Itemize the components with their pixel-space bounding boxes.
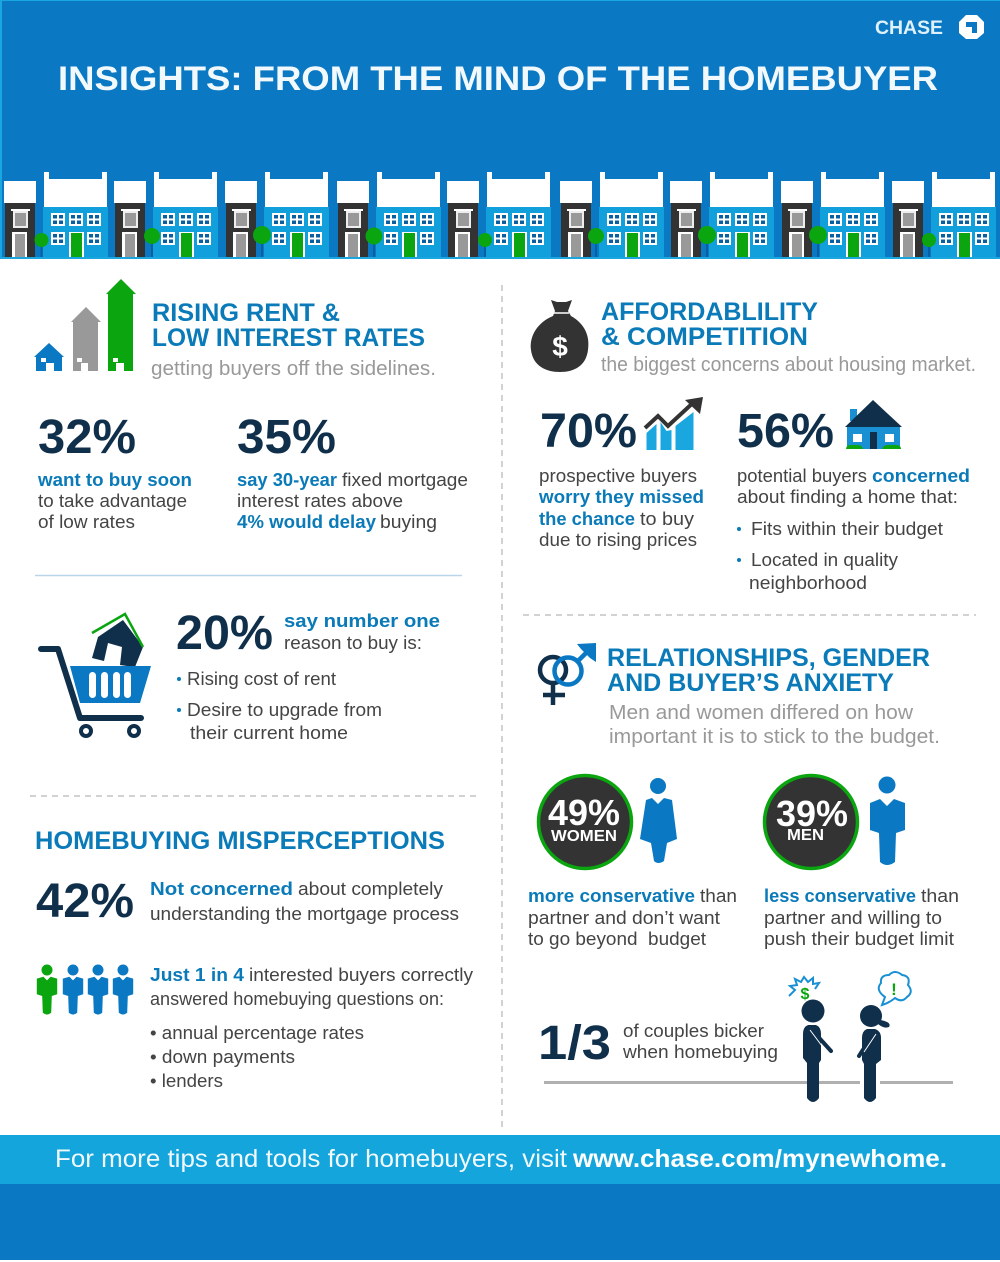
stat: 70% [538,405,704,550]
text: more conservative: more conservative [528,885,695,906]
text: just 1 in 4: Just 1 in 4 [150,964,245,985]
stat: 56%: about finding a home that: [737,486,958,507]
text: just 1 in 4: • annual percentage rates [150,1022,364,1043]
stat: 56% [737,405,970,593]
stat badge: 49% women [538,776,632,868]
icon: money bag [531,300,588,372]
heading: relationships [607,644,940,748]
heading: relationships: Men and women differed on how [609,702,914,724]
stat: 70%: prospective buyers [539,465,697,486]
text: just 1 in 4 [150,964,474,1091]
icon: four people [37,964,133,1015]
text: just 1 in 4: • lenders [150,1070,223,1091]
stat: 42%: 42% [36,875,134,928]
title: INSIGHTS: FROM THE MIND OF THE HOMEBUYER [58,60,938,98]
icon: thought cloud: ! [891,980,897,999]
stat: 32%: 32% [38,411,136,464]
text: just 1 in 4: • down payments [150,1046,295,1067]
stat: 20%: their current home [190,722,348,743]
heading: relationships: AND BUYER’S ANXIETY [607,669,894,697]
icon: house with roof [845,400,902,449]
icon: gender symbols [540,643,596,705]
icon: woman [640,778,677,863]
stat: 32%: want to buy soon [37,469,192,490]
icon: money bag: $ [552,331,568,362]
stat: 32%: of low rates [38,511,135,532]
icon: rising chart arrow [645,397,703,450]
stat: 70%: to buy [640,508,695,529]
text: more conservative [528,885,737,949]
stat badge: 39% men: MEN [787,827,824,844]
heading: affordability: AFFORDABLILITY [601,298,818,326]
stat: 20%: 20% [176,607,273,660]
text: more conservative: to go beyond budget [528,928,706,949]
stat: 32%: to take advantage [38,490,187,511]
stat: 20% [176,607,440,743]
footer text [55,1145,947,1173]
stat: 70%: worry they missed [538,486,704,507]
stat: 20%: Desire to upgrade from [187,699,382,720]
heading: rising rent [151,299,436,380]
text: less conservative: less conservative [764,885,916,906]
stat: 56%: 56% [737,405,834,458]
stat: 42%: about completely [298,878,444,899]
illustration: bickering couple [789,972,911,1102]
heading: rising rent: LOW INTEREST RATES [152,324,425,352]
stat: 56%: concerned [872,465,970,486]
stat: 42%: understanding the mortgage process [150,903,459,924]
text: just 1 in 4: answered homebuying questions on: [150,988,444,1009]
text: more conservative: partner and don’t want [528,907,720,928]
stat: 42% [36,875,459,928]
text: less conservative: push their budget limit [764,928,954,949]
stat: 42%: Not concerned [150,878,293,899]
stat: 70%: due to rising prices [539,529,697,550]
heading: rising rent: RISING RENT & [152,299,340,327]
stat: 56%: Located in quality [751,549,899,570]
stat: 56%: Fits within their budget [751,518,943,539]
heading: homebuying misperceptions: HOMEBUYING MISPERCEPTIONS [35,827,445,855]
stat: 1/3 of couples: when homebuying [622,1041,778,1062]
text: more conservative: than [700,885,737,906]
text: less conservative [764,885,959,949]
stat: 20%: reason to buy is: [284,632,422,653]
icon: frustration burst: $ [801,986,810,1003]
stat: 35%: fixed mortgage [342,469,468,490]
stat: 35%: 4% would delay [237,511,377,532]
stat: 70%: the chance [539,508,635,529]
stat: 56%: neighborhood [749,572,867,593]
logo: Chase: CHASE [875,18,943,39]
stat: 20%: Rising cost of rent [187,668,336,689]
stat: 1/3 of couples: of couples bicker [623,1020,764,1041]
figure: man [802,1000,831,1102]
stat: 35%: buying [380,511,437,532]
header banner [0,0,1000,259]
stat: 35%: 35% [237,411,336,464]
stat: 56%: potential buyers [737,465,867,486]
text: just 1 in 4: interested buyers correctly [249,964,474,985]
stat badge: 39% men [764,776,858,868]
section dividers [30,285,976,1128]
text: less conservative: partner and willing to [764,907,942,928]
stat: 20%: say number one [284,610,440,631]
stat: 35% [237,411,468,532]
ground line [544,1081,953,1084]
stat: 32% [37,411,192,532]
stat badge: 39% men: 39% [776,793,848,834]
icon: rising houses [34,279,136,371]
stat: 35%: say 30-year [237,469,337,490]
heading: rising rent: getting buyers off the sidelines. [151,358,436,380]
footer text: For more tips and tools for homebuyers, visit [55,1145,567,1173]
illustration: row of houses [4,172,996,257]
footer text: www.chase.com/mynewhome. [572,1145,947,1173]
stat: 70%: 70% [540,405,637,458]
heading: affordability [601,298,976,376]
footer band [0,1135,1000,1260]
logo: Chase [875,15,984,39]
stat: 1/3 of couples: 1/3 [538,1017,611,1070]
stat: 1/3 of couples [538,1017,778,1070]
stat badge: 49% women: 49% [548,792,620,833]
text: less conservative: than [921,885,959,906]
icon: man [870,776,905,865]
stat badge: 49% women: WOMEN [551,828,617,845]
heading: relationships: important it is to stick to the budget. [609,726,940,748]
heading: relationships: RELATIONSHIPS, GENDER [607,644,930,672]
icon: house in shopping cart [41,614,151,736]
figure: woman [859,1005,890,1102]
heading: affordability: & COMPETITION [601,323,808,351]
heading: affordability: the biggest concerns about housing market. [601,354,976,376]
stat: 35%: interest rates above [237,490,403,511]
